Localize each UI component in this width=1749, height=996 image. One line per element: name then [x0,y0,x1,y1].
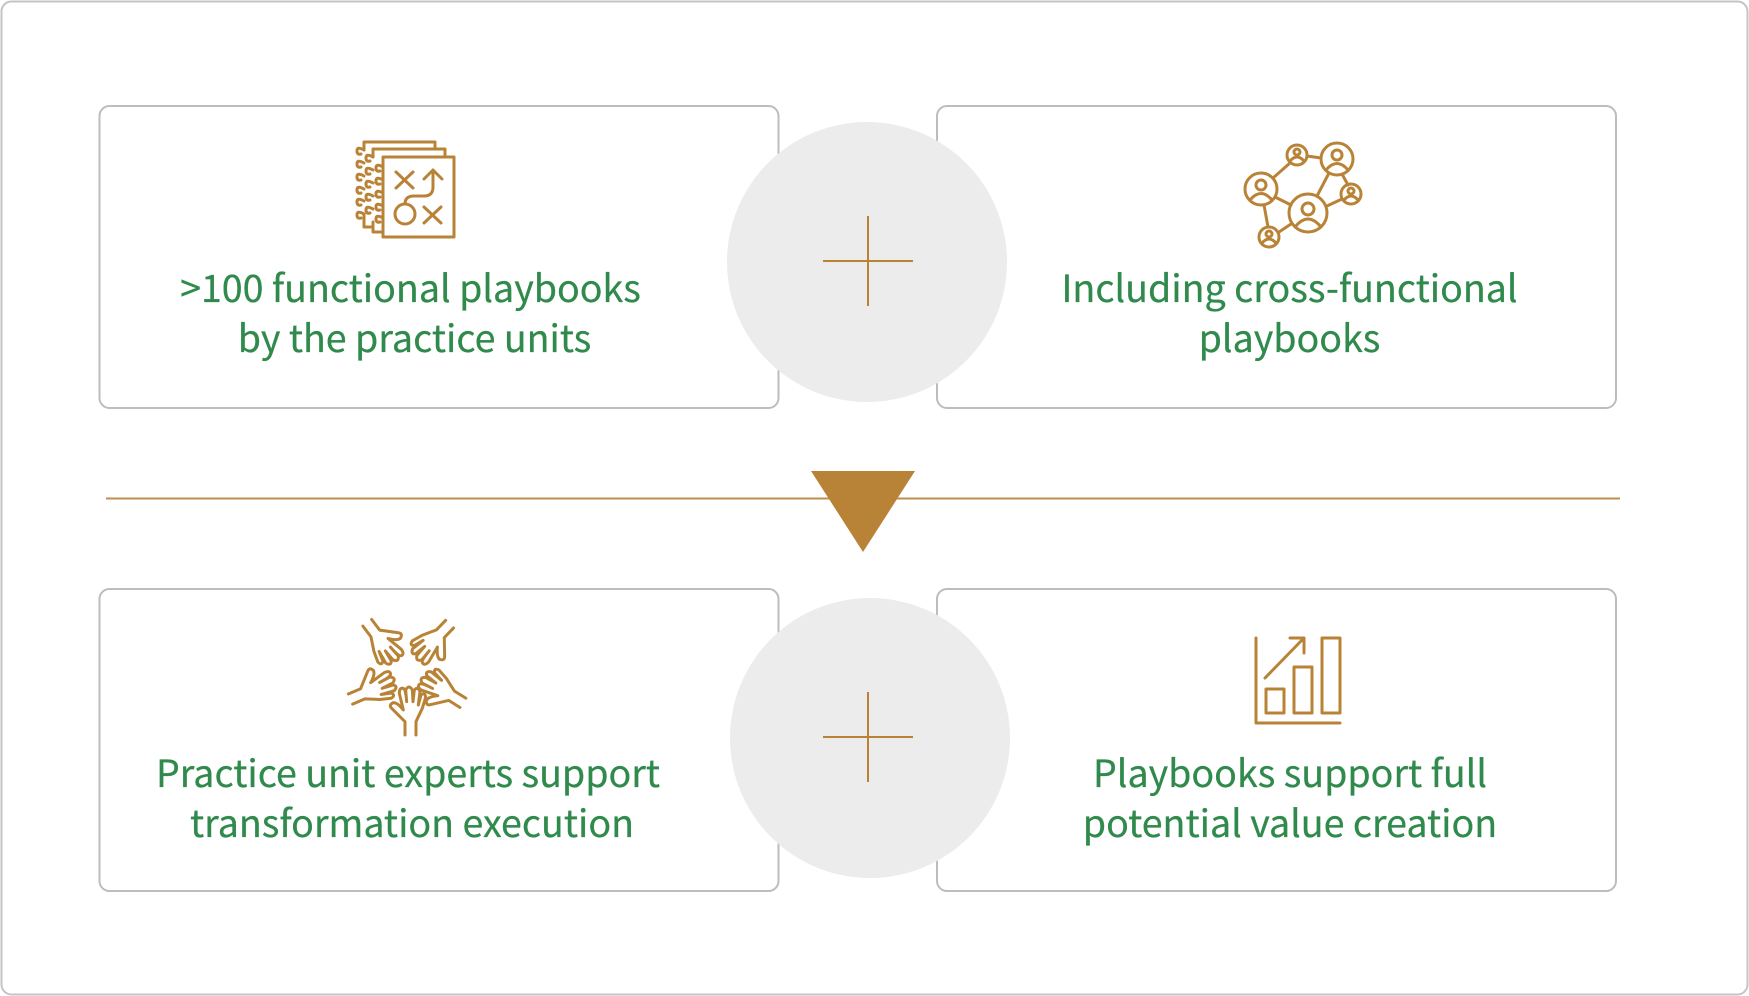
panel: value creation card [937,589,1616,891]
panel: practice unit experts card [100,589,778,891]
arrow: down triangle [811,471,915,552]
icon: rising bar chart [1256,638,1340,723]
icon: people network [1245,143,1361,247]
text: functional playbooks: by the practice units [238,308,591,363]
bottom plus circle [730,598,1010,878]
text: practice unit experts: transformation execution [190,793,634,848]
icon: five joined hands [343,611,471,735]
text: cross-functional playbooks: Including cross-functional [1061,258,1518,313]
panel: cross-functional playbooks card [937,106,1616,408]
text: value creation: Playbooks support full [1093,743,1487,798]
text: value creation: potential value creation [1083,793,1497,848]
text: practice unit experts: Practice unit experts support [156,743,660,798]
text: functional playbooks: >100 functional playbooks [180,258,641,313]
panel: functional playbooks card [100,106,778,408]
top plus circle [727,122,1007,402]
divider line [106,498,1620,500]
icon: playbooks [357,142,454,237]
text: cross-functional playbooks: playbooks [1199,308,1380,363]
